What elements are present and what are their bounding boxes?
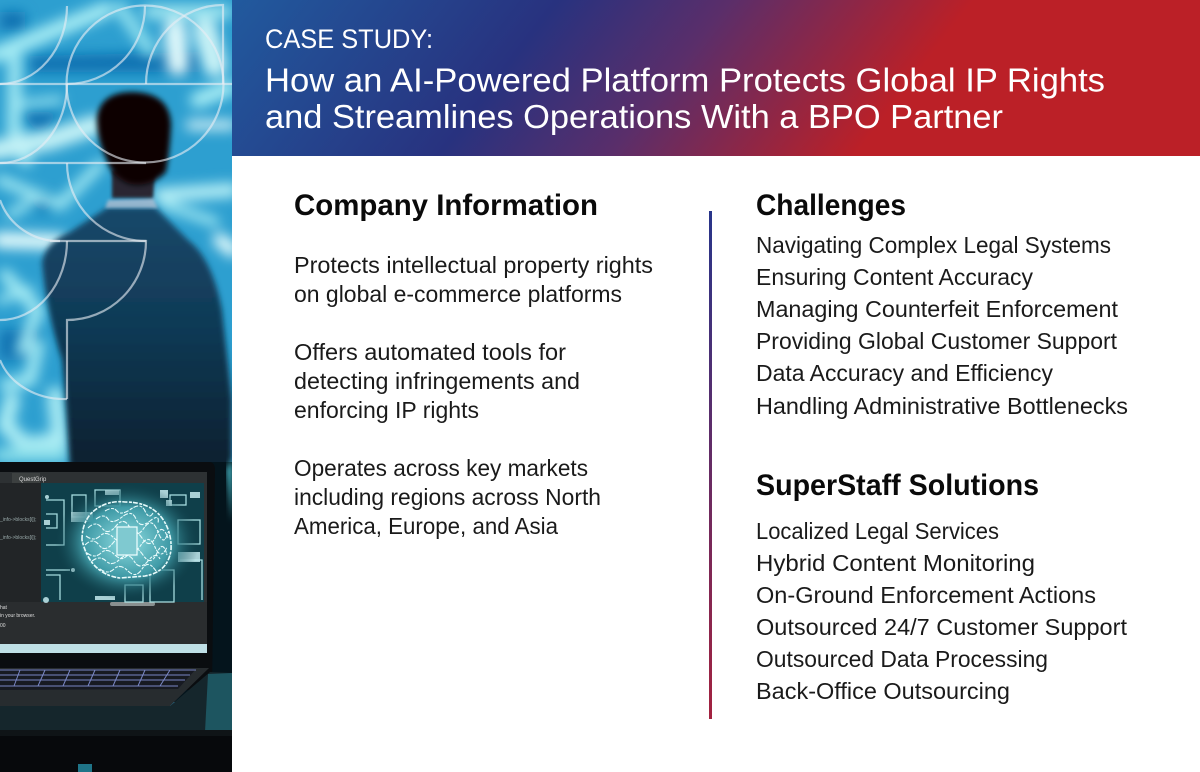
list: solutions: Outsourced Data Processing [756, 646, 1048, 672]
laptop: QuestGrip [19, 477, 47, 483]
list: challenges: Data Accuracy and Efficiency [756, 360, 1053, 386]
list: solutions: Outsourced 24/7 Customer Support [756, 614, 1128, 640]
title: How an AI-Powered Platform Protects Global IP Rights [265, 62, 1105, 98]
text block: key markets: Operates across key markets [294, 455, 588, 481]
list: solutions: Localized Legal Services [756, 518, 999, 544]
heading: company information: Company Information [294, 189, 598, 222]
heading: challenges: Challenges [756, 189, 906, 222]
list: challenges: Navigating Complex Legal Systems [756, 232, 1111, 258]
laptop: hat [0, 605, 8, 611]
laptop: _info->blocks[i]); [0, 535, 37, 541]
laptop: 00 [0, 623, 6, 629]
keyboard deck [0, 668, 209, 706]
laptop: in your browser. [0, 613, 35, 619]
header banner [232, 0, 1200, 156]
dark blue background patches [0, 12, 200, 360]
text block: intellectual property [294, 252, 653, 307]
glowing blurred network background [0, 8, 232, 455]
panel: superstaff solutions [756, 469, 1128, 704]
list: challenges [756, 232, 1128, 419]
heading: superstaff solutions: SuperStaff Solutions [756, 469, 1039, 502]
text block: key markets: including regions across North [294, 484, 601, 510]
divider [709, 211, 712, 719]
photo: person viewing AI wall display with laptop [0, 0, 232, 772]
dark area behind laptop [174, 462, 232, 702]
panel: challenges [756, 189, 1128, 419]
list: challenges: Ensuring Content Accuracy [756, 264, 1033, 290]
list: solutions: Back-Office Outsourcing [756, 678, 1010, 704]
title: and Streamlines Operations With a BPO Partner [265, 98, 1003, 135]
text block: automated tools: detecting infringements and [294, 368, 580, 394]
list: solutions [756, 518, 1128, 704]
text block: automated tools [294, 339, 580, 423]
list: solutions: Hybrid Content Monitoring [756, 550, 1035, 576]
eyebrow: case study: CASE STUDY: [265, 24, 433, 54]
list: solutions: On-Ground Enforcement Actions [756, 582, 1096, 608]
decorative geometric line overlay [0, 5, 232, 399]
title [265, 62, 1105, 135]
text block: key markets [294, 455, 601, 539]
text block: key markets: America, Europe, and Asia [294, 513, 558, 539]
list: challenges: Handling Administrative Bottlenecks [756, 393, 1128, 419]
text block: intellectual property: Protects intellectual property rights [294, 252, 653, 278]
list: challenges: Managing Counterfeit Enforcement [756, 296, 1119, 322]
laptop [0, 462, 215, 706]
text block: automated tools: enforcing IP rights [294, 397, 479, 423]
panel: company information [294, 189, 653, 539]
person silhouette [42, 92, 232, 470]
desk [0, 672, 232, 732]
circuit board image [46, 490, 202, 602]
brain [55, 484, 199, 600]
laptop: _info->blocks[i]); [0, 517, 37, 523]
list: challenges: Providing Global Customer Support [756, 328, 1118, 354]
text block: intellectual property: on global e-commerce platforms [294, 281, 622, 307]
text block: automated tools: Offers automated tools for [294, 339, 566, 365]
